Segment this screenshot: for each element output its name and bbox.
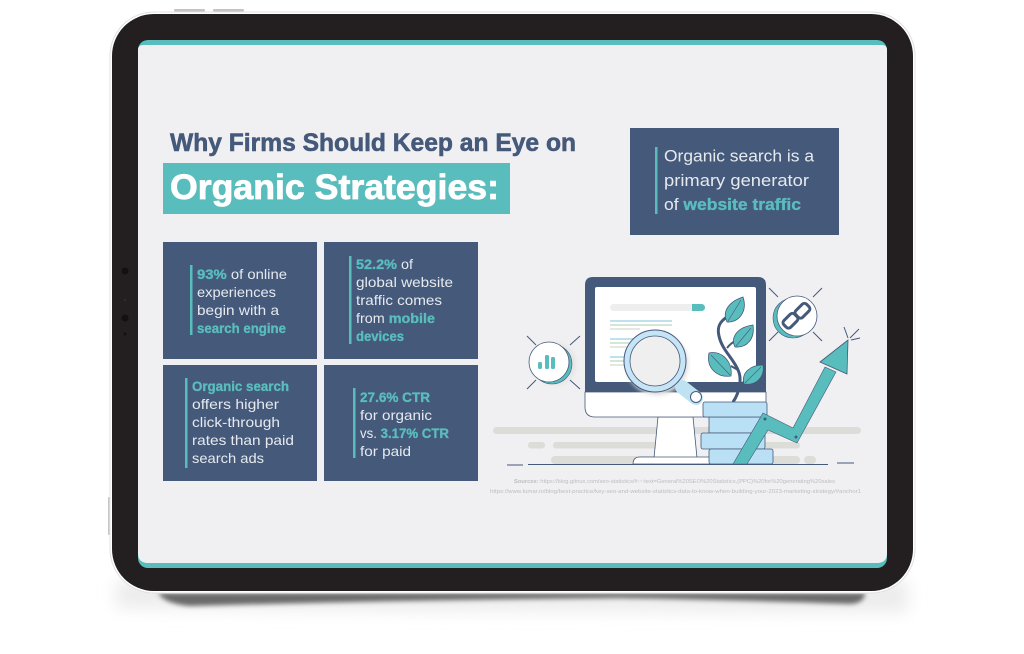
panel: CTR comparison: 27.6% CTR bbox=[360, 389, 430, 405]
panel: 52.2% stat: traffic comes bbox=[356, 292, 442, 308]
callout: website traffic: primary generator bbox=[664, 171, 809, 190]
icon: chart bubble bbox=[527, 336, 580, 389]
icon: link bubble bbox=[769, 288, 822, 341]
sources: https://www.lumar.io/blog/best-practice/key-seo-and-website-statistics-data-to-know-when-building-your-2023-marketing-strategy/#anchor1 bbox=[490, 489, 861, 495]
monitor bbox=[585, 277, 766, 464]
coin stack bbox=[701, 402, 773, 464]
callout: website traffic: of website traffic bbox=[664, 195, 801, 214]
panel: 52.2% stat bbox=[324, 242, 478, 359]
panel: 52.2% stat: devices bbox=[356, 328, 404, 344]
panel: 93% stat bbox=[163, 242, 317, 359]
panel: 52.2% stat: 52.2% of bbox=[356, 256, 413, 272]
panel: CTR comparison: for organic bbox=[360, 407, 432, 423]
title: Why Firms Should Keep an Eye on bbox=[170, 129, 576, 157]
panel: organic search click-through: Organic search bbox=[192, 378, 289, 394]
heading banner: Organic Strategies: Organic Strategies: bbox=[170, 168, 499, 207]
panel: 52.2% stat: from mobile bbox=[356, 310, 435, 326]
panel: 93% stat: search engine bbox=[197, 320, 286, 336]
screen bbox=[138, 40, 887, 568]
ground line bbox=[507, 463, 854, 465]
illustration: SEO monitor scene bbox=[493, 277, 861, 465]
panel: organic search click-through: search ads bbox=[192, 450, 264, 466]
growth arrow bbox=[733, 327, 860, 464]
panel: 93% stat: begin with a bbox=[197, 302, 279, 318]
panel: organic search click-through: click-through bbox=[192, 414, 280, 430]
panel: organic search click-through: offers higher bbox=[192, 396, 279, 412]
panel: CTR comparison: vs. 3.17% CTR bbox=[360, 425, 449, 441]
sources: Sources: https://blog.gitnux.com/seo-statistics/#:~:text=General%20SEO%20Statistics,(PPC)%20for%20generating%20sales bbox=[514, 479, 835, 485]
panel: CTR comparison: for paid bbox=[360, 443, 411, 459]
plant bbox=[709, 297, 763, 402]
search bar and result lines bbox=[610, 304, 705, 366]
tablet shadow bbox=[116, 580, 908, 612]
tablet device bbox=[108, 9, 915, 593]
panel: 93% stat: experiences bbox=[197, 284, 276, 300]
panel: organic search click-through: rates than paid bbox=[192, 432, 294, 448]
panel: 52.2% stat: global website bbox=[356, 274, 453, 290]
sources bbox=[490, 479, 861, 495]
panel: organic search click-through bbox=[163, 365, 317, 481]
panel: CTR comparison bbox=[324, 365, 478, 481]
callout: website traffic bbox=[630, 128, 839, 235]
panel: 93% stat: 93% of online bbox=[197, 266, 287, 282]
magnifying glass bbox=[624, 330, 702, 402]
callout: website traffic: Organic search is a bbox=[664, 146, 815, 166]
ground bands bbox=[493, 427, 861, 464]
